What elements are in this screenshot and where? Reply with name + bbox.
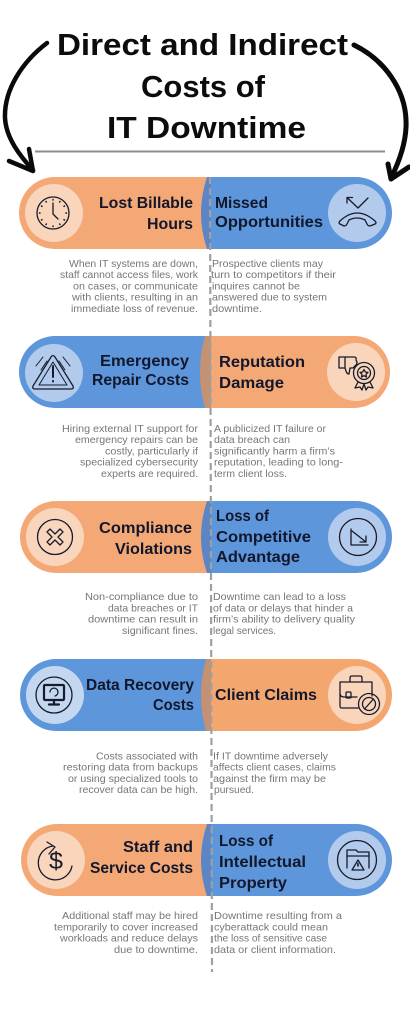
panel: row 1 bbox=[19, 177, 392, 249]
text block: compliance violations: downtime can result in bbox=[88, 614, 198, 626]
heading: compliance violations bbox=[99, 520, 192, 558]
title underline bbox=[35, 150, 385, 152]
text block: reputation damage: A publicized IT failure or bbox=[214, 423, 326, 435]
title: Costs of bbox=[141, 69, 266, 104]
heading: emergency repair costs: Emergency bbox=[100, 353, 189, 370]
panel: row 4 bbox=[20, 659, 392, 731]
text block: lost billable hours: staff cannot access files, work bbox=[60, 269, 199, 281]
text block: emergency repair costs: specialized cybersecurity bbox=[80, 456, 199, 468]
text block: reputation damage: reputation, leading to long- bbox=[214, 456, 344, 468]
heading: loss of intellectual property bbox=[219, 833, 306, 892]
heading: loss of competitive advantage: Competitive bbox=[216, 529, 311, 546]
circle left bbox=[25, 184, 83, 242]
heading: lost billable hours: Hours bbox=[147, 216, 193, 233]
icon: dollar cycle: $ bbox=[49, 848, 63, 875]
emergency repair pill half bbox=[19, 336, 210, 408]
text block: loss of intellectual property: Downtime resulting from a bbox=[214, 910, 342, 922]
center dashed divider bbox=[210, 177, 212, 972]
circle left bbox=[27, 831, 85, 889]
text block: loss of competitive advantage: legal services. bbox=[213, 625, 276, 637]
text block: data recovery costs bbox=[63, 750, 198, 796]
text block: lost billable hours: immediate loss of revenue. bbox=[71, 303, 198, 315]
circle right bbox=[328, 831, 386, 889]
text block: client claims bbox=[213, 750, 336, 796]
text block: client claims: against the firm may be bbox=[213, 773, 326, 785]
loss of competitive advantage pill half bbox=[210, 501, 392, 573]
icon: briefcase with prohibition bbox=[340, 676, 380, 714]
compliance violations pill half bbox=[20, 501, 210, 573]
lost billable hours pill half bbox=[19, 177, 210, 249]
heading: loss of competitive advantage: Advantage bbox=[216, 549, 300, 566]
icon: folder warning bbox=[338, 840, 376, 880]
text block: emergency repair costs: emergency repairs can be bbox=[75, 434, 198, 446]
text block: loss of intellectual property: the loss of sensitive case bbox=[214, 932, 327, 944]
heading: missed opportunities: Opportunities bbox=[215, 214, 323, 231]
heading: missed opportunities bbox=[215, 195, 323, 231]
heading: data recovery costs: Costs bbox=[153, 697, 194, 714]
text block: missed opportunities: answered due to system bbox=[212, 292, 327, 304]
center band bbox=[201, 177, 211, 249]
heading: compliance violations: Compliance bbox=[99, 520, 192, 537]
text block: compliance violations: Non-compliance due to bbox=[85, 591, 198, 603]
center band bbox=[200, 336, 211, 408]
icon: missed call bbox=[339, 198, 376, 226]
heading: staff and service costs: Staff and bbox=[123, 839, 193, 856]
heading: reputation damage: Damage bbox=[219, 375, 284, 392]
text block: loss of intellectual property bbox=[214, 910, 342, 956]
arrow: left curved bbox=[5, 43, 47, 171]
text block: missed opportunities bbox=[211, 258, 337, 315]
circle left bbox=[25, 344, 83, 402]
text block: compliance violations: significant fines. bbox=[122, 625, 198, 637]
heading: emergency repair costs bbox=[92, 353, 189, 389]
data recovery pill half bbox=[20, 659, 210, 731]
text block: loss of intellectual property: cyberattack could mean bbox=[214, 922, 328, 934]
heading: loss of intellectual property: Property bbox=[219, 875, 287, 892]
icon: thumbs down and award bbox=[339, 357, 374, 390]
center band bbox=[201, 659, 211, 731]
text block: client claims: If IT downtime adversely bbox=[213, 750, 329, 762]
text block: missed opportunities: downtime. bbox=[212, 303, 262, 315]
center band bbox=[201, 501, 211, 573]
heading: compliance violations: Violations bbox=[115, 541, 192, 558]
text block: staff and service costs bbox=[54, 910, 198, 956]
panel: row 5 bbox=[21, 824, 392, 896]
title: Direct and Indirect bbox=[57, 27, 348, 62]
text block: missed opportunities: Prospective clients may bbox=[212, 258, 324, 270]
center band bbox=[201, 824, 211, 896]
text block: lost billable hours: on cases, or communicate bbox=[73, 280, 198, 292]
heading: data recovery costs bbox=[86, 677, 194, 714]
client claims pill half bbox=[210, 659, 392, 731]
text block: loss of intellectual property: data or client information. bbox=[214, 944, 336, 956]
heading: lost billable hours: Lost Billable bbox=[99, 195, 193, 212]
text block: data recovery costs: Costs associated with bbox=[96, 750, 198, 762]
circle left bbox=[26, 508, 84, 566]
heading: loss of competitive advantage bbox=[216, 508, 311, 566]
heading: client claims: Client Claims bbox=[215, 687, 317, 704]
text block: lost billable hours: When IT systems are down, bbox=[69, 258, 198, 270]
text block: emergency repair costs: costly, particularly if bbox=[105, 446, 198, 458]
text block: staff and service costs: due to downtime. bbox=[114, 944, 198, 956]
heading: emergency repair costs: Repair Costs bbox=[92, 372, 189, 389]
text block: emergency repair costs: experts are required. bbox=[101, 468, 198, 480]
panel: row 2 bbox=[19, 336, 390, 408]
text block: compliance violations bbox=[85, 591, 199, 637]
icon: clock bbox=[37, 197, 69, 229]
text block: emergency repair costs bbox=[62, 423, 199, 480]
circle right bbox=[328, 184, 386, 242]
heading: data recovery costs: Data Recovery bbox=[86, 677, 194, 694]
text block: compliance violations: data breaches or IT bbox=[108, 602, 199, 614]
reputation damage pill half bbox=[210, 336, 390, 408]
title bbox=[57, 27, 348, 145]
text block: loss of competitive advantage: Downtime can lead to a loss bbox=[213, 591, 346, 603]
text block: data recovery costs: or using specialized tools to bbox=[68, 773, 198, 785]
text block: emergency repair costs: Hiring external IT support for bbox=[62, 423, 199, 435]
loss of intellectual property pill half bbox=[210, 824, 392, 896]
heading: loss of intellectual property: Intellectual bbox=[219, 854, 306, 871]
circle left bbox=[26, 666, 84, 724]
heading: staff and service costs: Service Costs bbox=[90, 860, 193, 877]
text block: reputation damage: significantly harm a firm’s bbox=[214, 446, 335, 458]
circle right bbox=[328, 508, 386, 566]
text block: client claims: affects client cases, claims bbox=[213, 762, 336, 774]
text block: data recovery costs: recover data can be high. bbox=[79, 784, 198, 796]
text block: reputation damage bbox=[214, 423, 344, 480]
text block: client claims: pursued. bbox=[214, 784, 254, 796]
heading: reputation damage bbox=[219, 354, 305, 392]
title: IT Downtime bbox=[107, 110, 306, 145]
text block: reputation damage: data breach can bbox=[214, 434, 290, 446]
text block: staff and service costs: Additional staff may be hired bbox=[62, 910, 198, 922]
text block: missed opportunities: inquires cannot be bbox=[212, 280, 300, 292]
circle right bbox=[327, 343, 385, 401]
icon: x in circle bbox=[38, 520, 72, 554]
circle right bbox=[328, 666, 386, 724]
heading: loss of competitive advantage: Loss of bbox=[216, 508, 270, 525]
staff and service costs pill half bbox=[21, 824, 210, 896]
heading: staff and service costs bbox=[90, 839, 193, 877]
heading: missed opportunities: Missed bbox=[215, 195, 268, 212]
text block: loss of competitive advantage: firm’s ability to delivery quality bbox=[213, 614, 356, 626]
text block: staff and service costs: temporarily to cover increased bbox=[54, 922, 198, 934]
text block: reputation damage: term client loss. bbox=[214, 468, 287, 480]
heading: lost billable hours bbox=[99, 195, 193, 233]
arrow: right curved bbox=[354, 45, 409, 179]
heading: reputation damage: Reputation bbox=[219, 354, 305, 371]
text block: loss of competitive advantage: of data or delays that hinder a bbox=[213, 602, 353, 614]
panel: row 3 bbox=[20, 501, 392, 573]
icon: monitor recovery bbox=[36, 677, 72, 713]
text block: staff and service costs: workloads and reduce delays bbox=[59, 932, 198, 944]
text block: data recovery costs: restoring data from backups bbox=[63, 762, 198, 774]
text block: missed opportunities: turn to competitors if their bbox=[211, 269, 337, 281]
text block: lost billable hours bbox=[60, 258, 199, 315]
missed opportunities pill half bbox=[210, 177, 392, 249]
heading: loss of intellectual property: Loss of bbox=[219, 833, 274, 850]
text block: loss of competitive advantage bbox=[213, 591, 356, 637]
icon: warning triangle bbox=[33, 356, 73, 389]
icon: declining chart bbox=[340, 518, 376, 556]
text block: lost billable hours: with clients, resulting in an bbox=[71, 292, 198, 304]
icon: dollar cycle bbox=[38, 842, 72, 880]
